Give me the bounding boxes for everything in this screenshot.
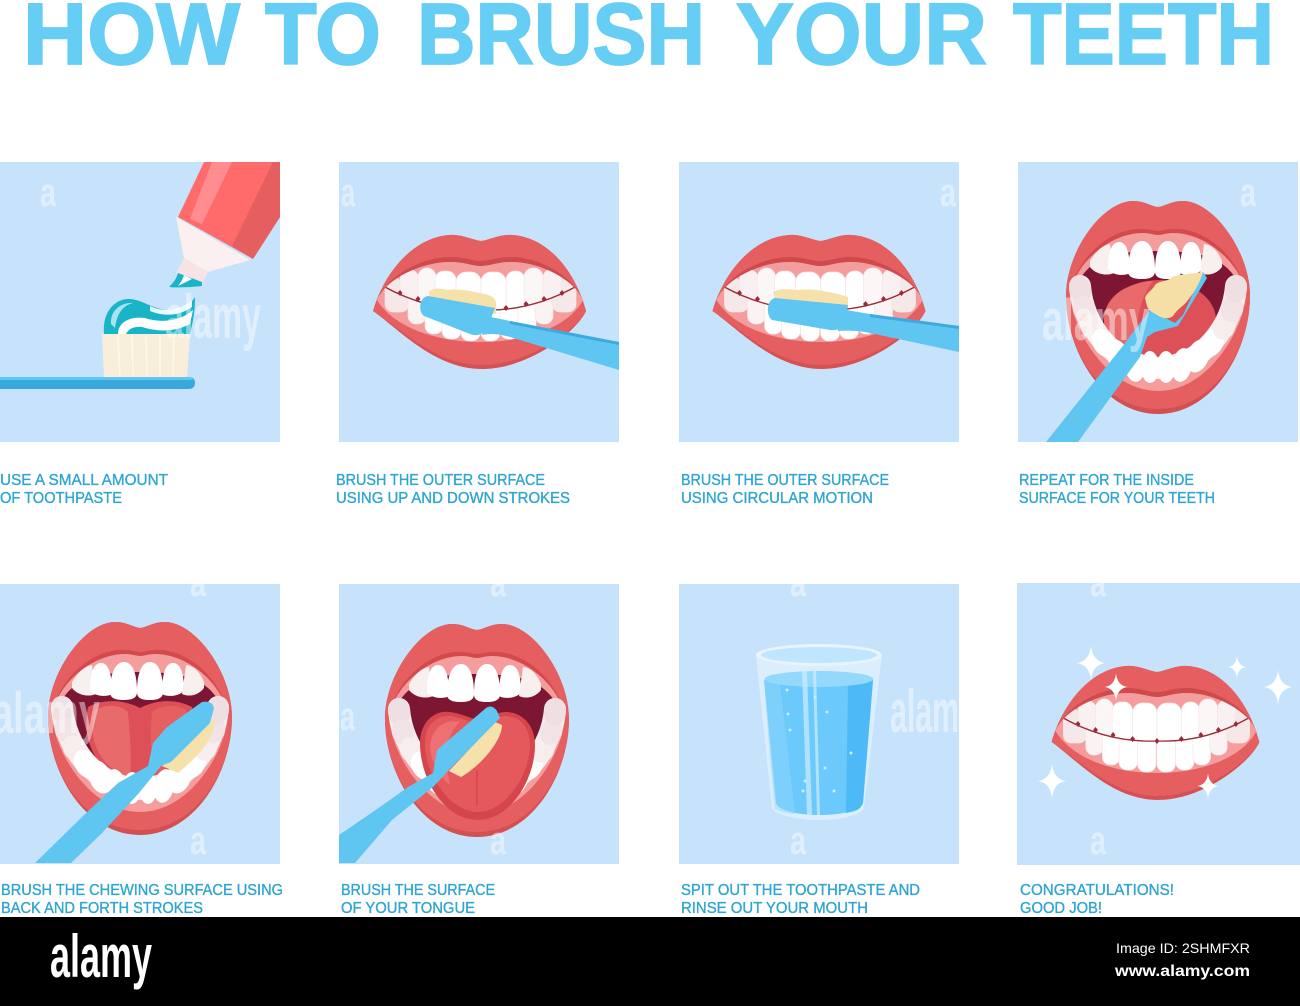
watermark: alamy	[1042, 288, 1150, 353]
website: www.alamy.com	[1114, 963, 1250, 980]
caption: step 5: BACK AND FORTH STROKES	[1, 900, 203, 917]
caption: step 1: OF TOOTHPASTE	[0, 490, 122, 507]
caption: step 3	[681, 472, 889, 507]
caption: step 8	[1020, 882, 1174, 917]
watermark	[0, 561, 207, 863]
footer bar	[0, 917, 1300, 1006]
icon: toothbrush bristles	[102, 334, 190, 377]
caption: step 2: BRUSH THE OUTER SURFACE	[336, 472, 545, 489]
watermark: a	[490, 561, 507, 605]
watermark	[340, 561, 507, 863]
title	[23, 0, 1274, 83]
icon: tongue	[420, 712, 535, 820]
panel: step 6 tongue	[339, 561, 619, 864]
icon: glass of water	[756, 644, 882, 820]
icon: toothbrush	[768, 289, 959, 352]
icon: toothbrush	[339, 707, 502, 863]
watermark	[790, 561, 959, 863]
icon: smiling mouth	[373, 235, 586, 369]
watermark: a	[1090, 819, 1107, 863]
watermark	[40, 171, 261, 352]
caption: step 6: OF YOUR TONGUE	[341, 900, 475, 917]
icon: clean smile	[1052, 666, 1259, 800]
icon: toothbrush handle	[0, 377, 195, 389]
watermark: a	[790, 819, 807, 863]
icon: sparkles	[1038, 646, 1292, 799]
caption: step 2: USING UP AND DOWN STROKES	[336, 490, 570, 507]
watermark	[1042, 171, 1257, 353]
caption: step 3: USING CIRCULAR MOTION	[681, 490, 873, 507]
panel: step 3 circular motion	[679, 162, 959, 442]
panel: step 4 inside surface	[1018, 162, 1298, 442]
watermark: a	[1240, 171, 1257, 215]
panel: step 2 up and down strokes	[339, 162, 619, 442]
icon: smiling mouth	[712, 235, 926, 369]
panel: step 7 rinse	[679, 561, 959, 864]
watermark: alamy	[165, 283, 261, 352]
icon: toothbrush	[1046, 272, 1207, 442]
icon: toothpaste tube	[169, 162, 280, 287]
icon: open mouth	[48, 622, 232, 835]
panel: step 5 chewing surface	[0, 561, 280, 864]
watermark: a	[940, 171, 957, 215]
watermark: a	[40, 171, 57, 215]
watermark: a	[190, 561, 207, 605]
panel: step 8 congratulations	[1017, 561, 1300, 865]
caption: step 5	[1, 882, 283, 917]
caption: step 8: GOOD JOB!	[1020, 900, 1102, 917]
caption: step 6	[341, 882, 495, 917]
caption: step 1: USE A SMALL AMOUNT	[0, 472, 169, 489]
icon: open mouth	[1066, 201, 1250, 414]
caption: step 7: RINSE OUT YOUR MOUTH	[681, 900, 868, 917]
watermark	[1090, 561, 1107, 863]
caption: step 7	[681, 882, 920, 917]
icon: open mouth	[385, 624, 569, 837]
caption: step 5: BRUSH THE CHEWING SURFACE USING	[1, 882, 283, 899]
panel: step 1 use toothpaste	[0, 162, 280, 442]
icon: toothbrush	[35, 702, 214, 863]
image id: Image ID: 2SHMFXR	[1116, 940, 1250, 956]
watermark: a	[790, 561, 807, 605]
caption: step 8: CONGRATULATIONS!	[1020, 882, 1174, 899]
caption: step 4	[1019, 472, 1215, 507]
caption: step 7: SPIT OUT THE TOOTHPASTE AND	[681, 882, 920, 899]
watermark: alam	[890, 678, 959, 745]
watermark: a	[190, 819, 207, 863]
caption: step 3: BRUSH THE OUTER SURFACE	[681, 472, 889, 489]
watermark: a	[341, 171, 355, 215]
watermark: a	[1090, 561, 1107, 605]
caption: step 1	[0, 472, 169, 507]
caption: step 4: REPEAT FOR THE INSIDE	[1019, 472, 1194, 489]
caption: step 4: SURFACE FOR YOUR TEETH	[1019, 490, 1215, 507]
icon: toothbrush	[420, 289, 619, 370]
footer logo: alamy	[50, 923, 152, 990]
watermark: a	[490, 819, 507, 863]
caption: step 2	[336, 472, 570, 507]
caption: step 6: BRUSH THE SURFACE	[341, 882, 495, 899]
icon: toothpaste on bristles	[104, 297, 195, 334]
watermark: a	[340, 695, 356, 739]
